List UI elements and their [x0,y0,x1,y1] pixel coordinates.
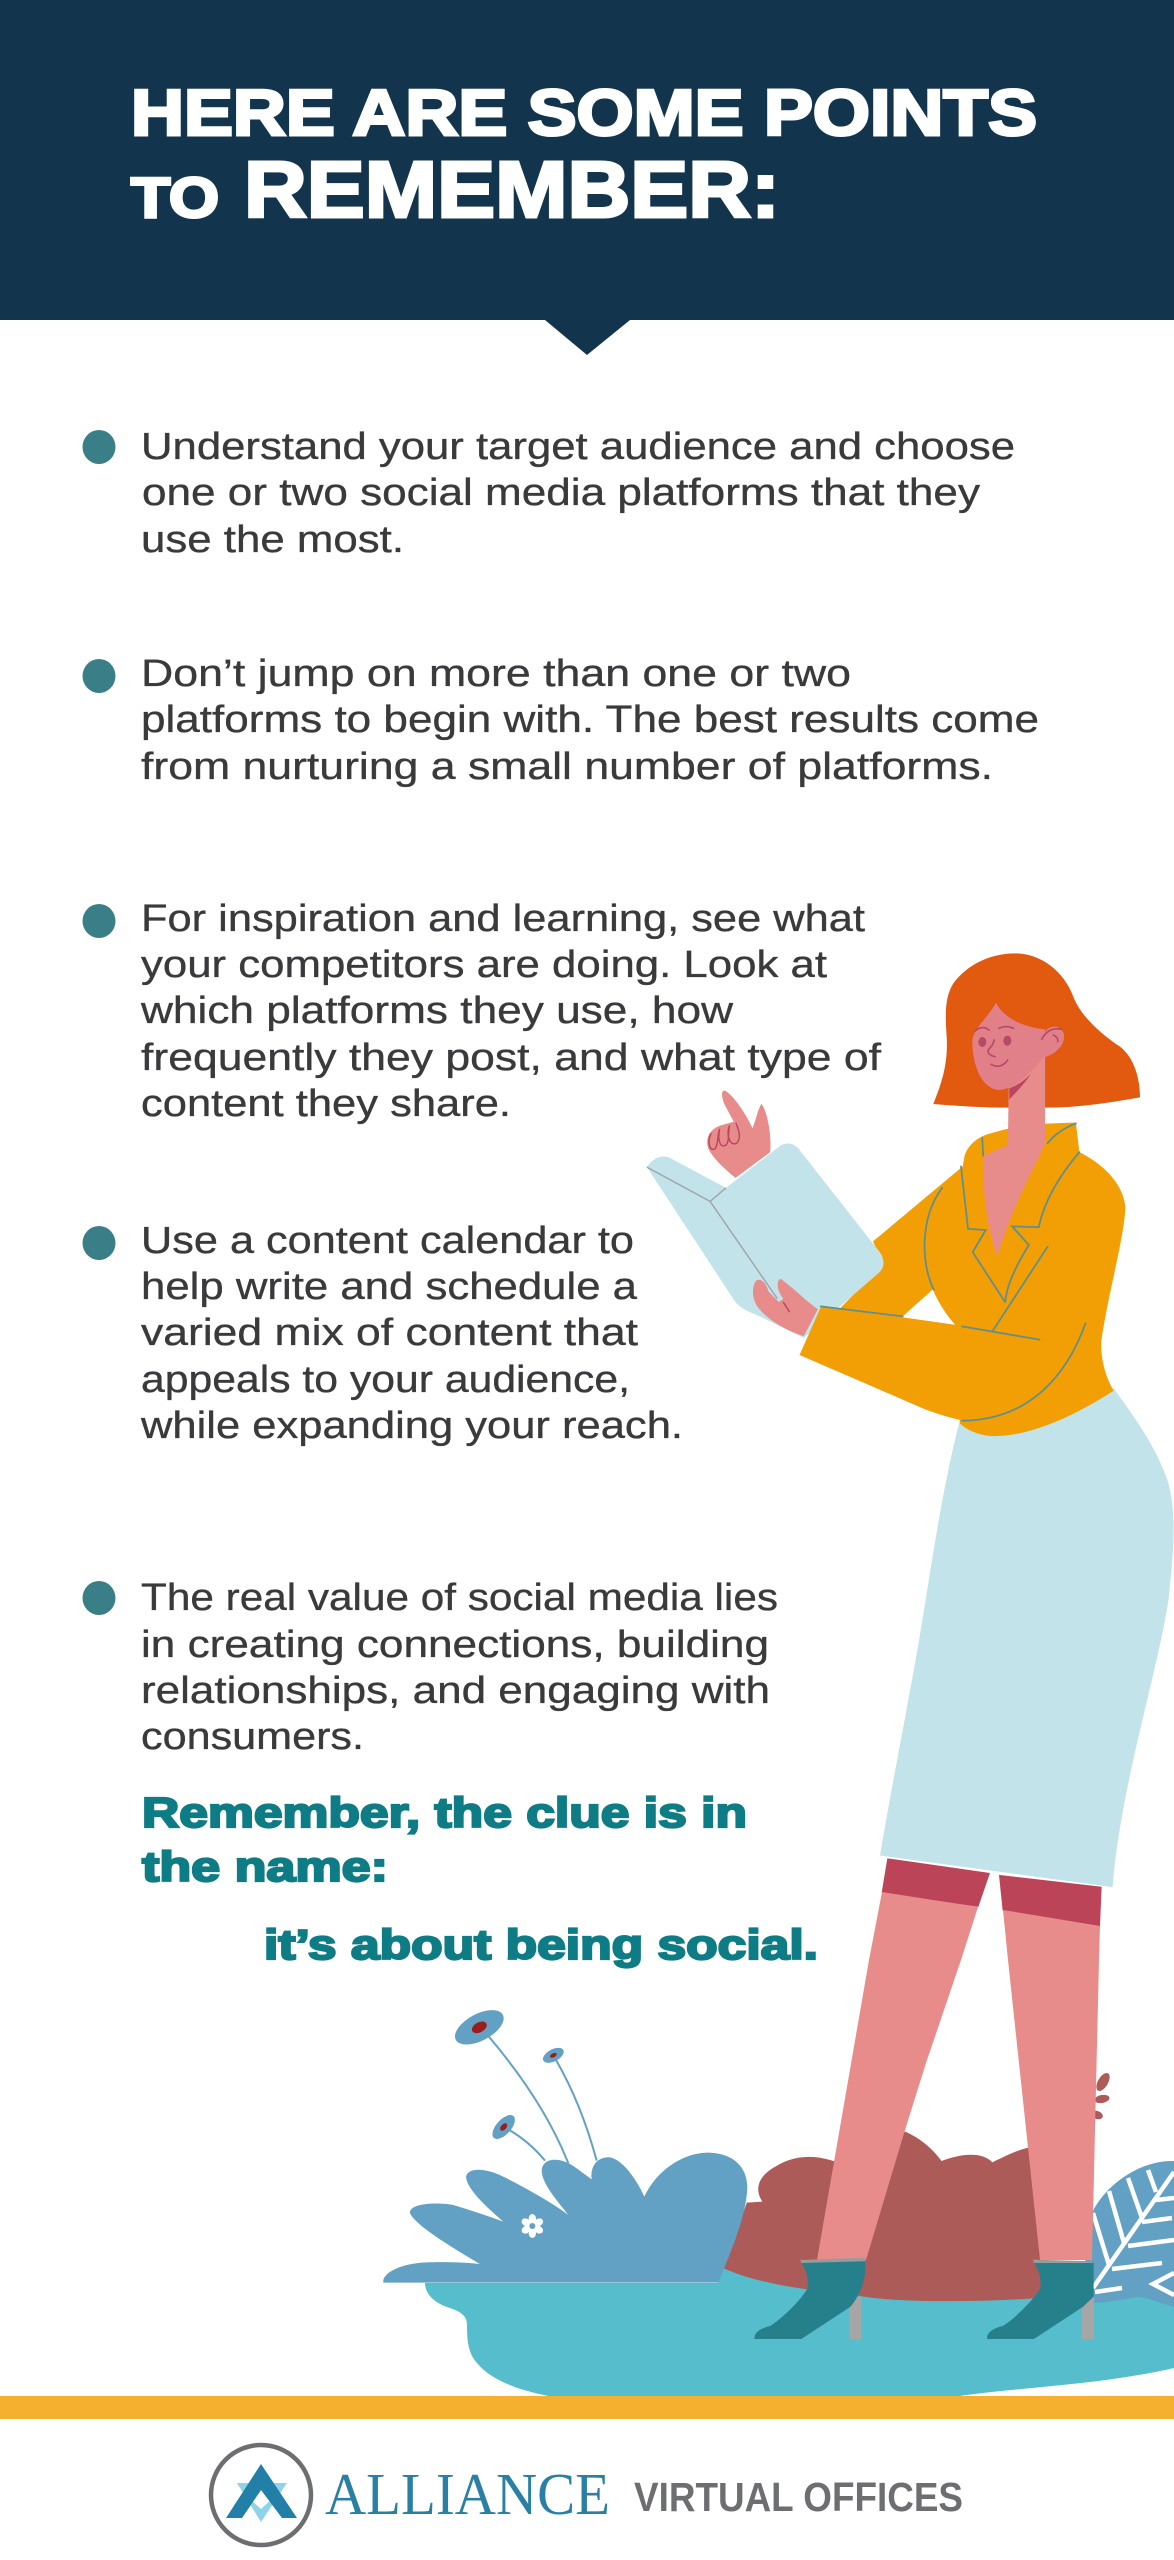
stocking bands [882,1858,1102,1926]
logo [211,2445,963,2545]
point 2 [82,653,1039,788]
point 4: Use a content calendar to [141,1220,634,1262]
point 1: Understand your target audience and choose [141,426,1015,468]
title [131,76,1037,234]
illustration: woman reading a book [647,953,1174,2339]
point 5: The real value of social media lies [141,1577,778,1619]
point 2: Don’t jump on more than one or two [141,653,851,695]
point 1: one or two social media platforms that they [142,472,980,514]
legs [817,1892,1100,2260]
brown bush [723,2132,1051,2303]
back arm [839,1166,963,1316]
skirt [880,1388,1174,1887]
point 1 [82,426,1015,561]
illustration: garden scene [383,2003,1174,2397]
icon: striped leaf [1078,2161,1174,2312]
closing message [142,1789,818,1968]
open book [647,1144,883,1338]
icon: logo emblem [211,2445,311,2545]
header banner [0,0,1174,355]
lower hand [753,1279,818,1336]
point 3: your competitors are doing. Look at [141,944,827,986]
neck and chest [983,1056,1045,1256]
point 1: use the most. [141,519,404,561]
point 4: help write and schedule a [141,1266,638,1308]
point 4: appeals to your audience, [141,1359,630,1401]
point 3: content they share. [141,1083,511,1125]
point 4 [82,1220,683,1447]
closing message: the name: [142,1843,388,1890]
point 5: in creating connections, building [141,1624,769,1666]
point 3: frequently they post, and what type of [141,1037,882,1079]
point 5 [82,1577,778,1758]
upper body [647,1056,1125,1436]
blue bush with flowers [383,2003,747,2283]
icon: white flower [520,2214,545,2238]
raised hand [707,1091,771,1178]
company name: ALLIANCE [325,2461,610,2527]
point 3: For inspiration and learning, see what [141,898,865,940]
point 4: while expanding your reach. [140,1405,683,1447]
face [972,1003,1064,1099]
title: TO [131,166,219,230]
jacket [800,1122,1125,1436]
title: REMEMBER: [244,145,780,234]
teal ground [425,2268,1174,2397]
boots [754,2258,1094,2339]
point 2: platforms to begin with. The best results come [141,699,1039,741]
point 2: from nurturing a small number of platforms. [141,746,993,788]
point 5: consumers. [141,1716,364,1758]
point 4: varied mix of content that [141,1312,639,1354]
closing message: Remember, the clue is in [142,1789,747,1836]
yellow divider bar [0,2396,1174,2419]
company descriptor: VIRTUAL OFFICES [634,2474,963,2520]
icon: red sprig [1090,2071,1112,2121]
closing message: it’s about being social. [264,1921,818,1968]
hair [933,953,1140,1108]
point 3: which platforms they use, how [140,990,734,1032]
title: HERE ARE SOME POINTS [131,76,1037,149]
point 3 [82,898,882,1125]
point 5: relationships, and engaging with [141,1670,770,1712]
jacket seams [821,1124,1085,1421]
